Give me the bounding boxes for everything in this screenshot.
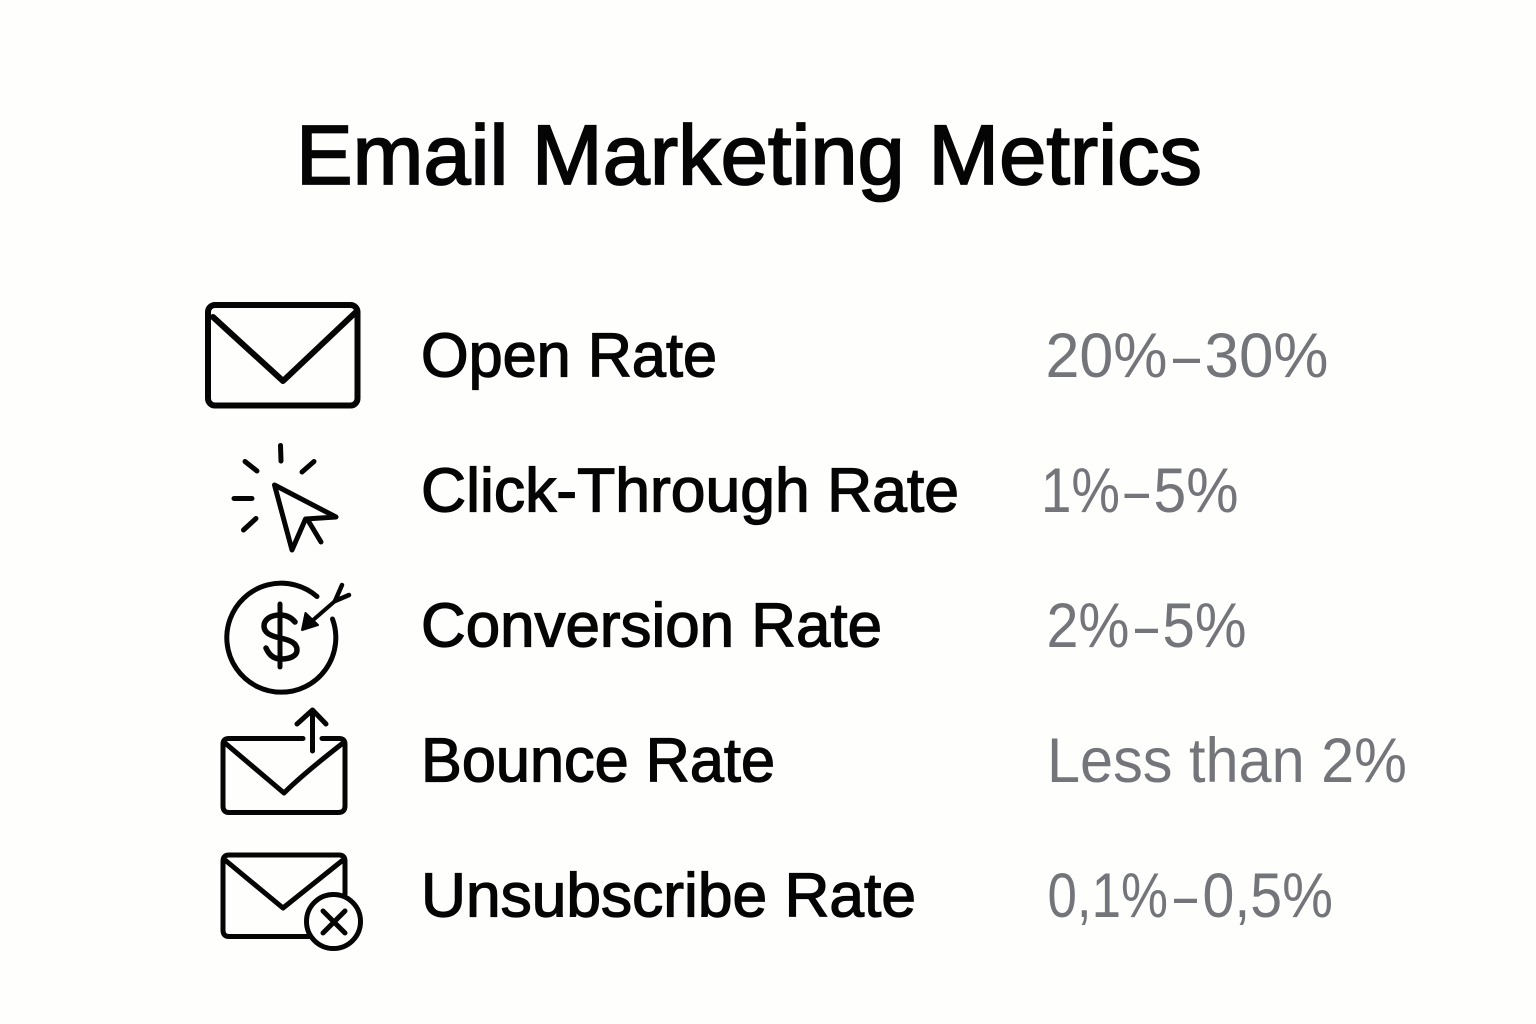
value: unsubscribe rate <box>1048 861 1333 931</box>
row: conversion rate <box>227 583 1246 692</box>
value: open rate: – <box>1173 321 1200 391</box>
label: click-through rate: Click-Through Rate <box>421 456 959 526</box>
row: open rate <box>208 305 1328 406</box>
icon: envelope with x <box>223 855 360 948</box>
value: conversion rate: 5% <box>1162 591 1246 661</box>
label: conversion rate: Conversion Rate <box>421 592 882 660</box>
label: unsubscribe rate: Unsubscribe Rate <box>421 862 916 930</box>
value: bounce rate: Less than 2% <box>1047 726 1407 796</box>
value: open rate: 20% <box>1046 321 1168 391</box>
value: conversion rate: 2% <box>1046 591 1130 661</box>
value: conversion rate <box>1046 591 1246 661</box>
value: unsubscribe rate: 0,5% <box>1202 861 1333 931</box>
icon: envelope <box>208 305 358 406</box>
value: unsubscribe rate: – <box>1174 861 1197 931</box>
title: Email Marketing Metrics <box>296 108 1202 202</box>
label: open rate: Open Rate <box>421 322 717 390</box>
icon: cursor click <box>234 446 336 550</box>
row: bounce rate <box>223 710 1407 812</box>
value: click-through rate: 5% <box>1154 456 1238 526</box>
icon: envelope with up arrow <box>223 710 345 812</box>
value: click-through rate: 1% <box>1041 456 1120 526</box>
row: unsubscribe rate <box>223 855 1333 948</box>
icon: dollar target <box>227 583 349 692</box>
label: bounce rate: Bounce Rate <box>421 726 775 796</box>
row: click-through rate <box>234 446 1238 550</box>
value: click-through rate: – <box>1124 456 1149 526</box>
value: unsubscribe rate: 0,1% <box>1048 861 1168 931</box>
value: click-through rate <box>1041 456 1238 526</box>
value: open rate: 30% <box>1204 321 1328 391</box>
value: conversion rate: – <box>1135 591 1158 661</box>
value: open rate <box>1046 321 1328 391</box>
